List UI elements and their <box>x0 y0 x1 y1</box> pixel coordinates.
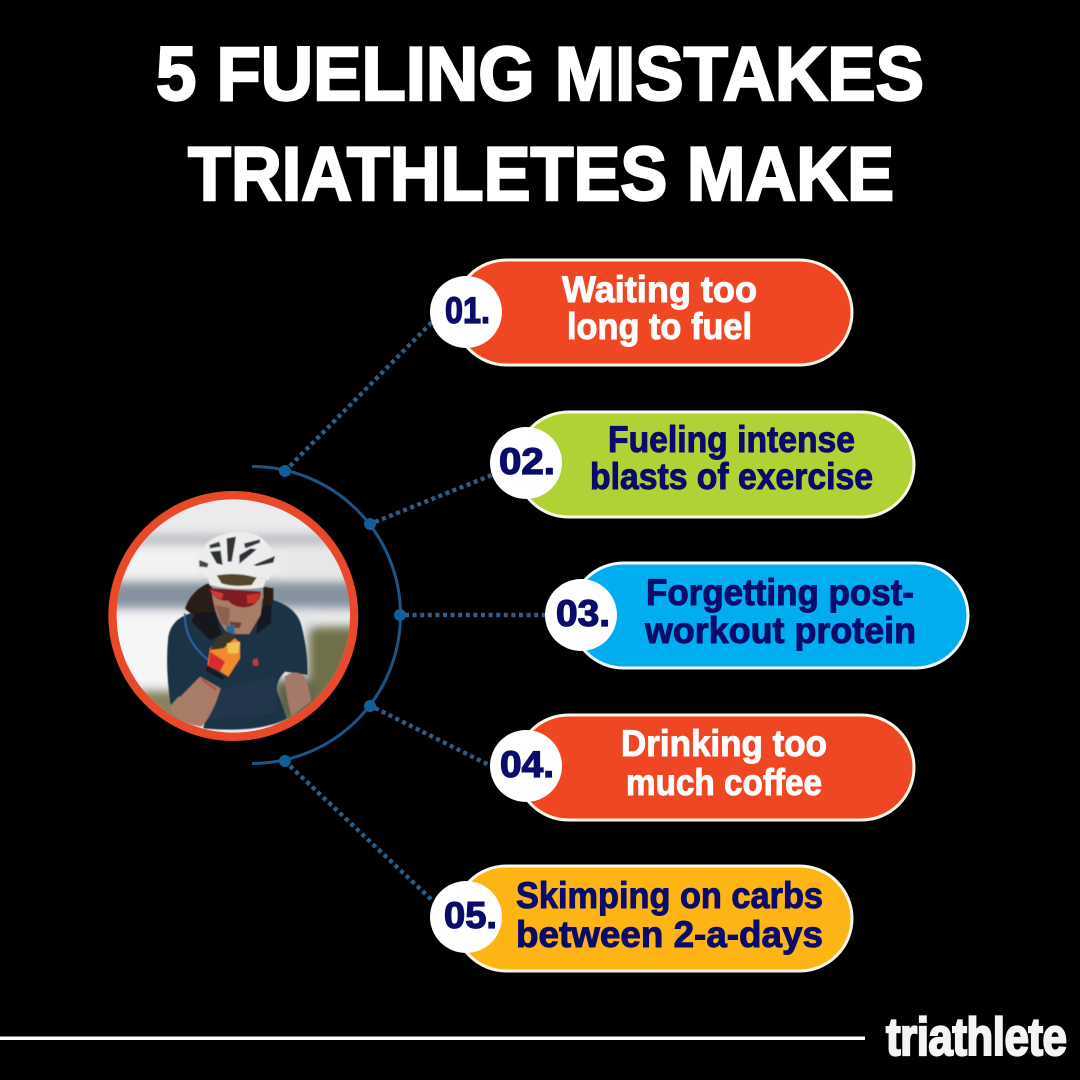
pill 01: waiting too long to fuel <box>430 260 852 365</box>
label 04: much coffee <box>626 762 822 803</box>
face <box>212 592 263 634</box>
photo: cyclist drinking in red ring <box>108 491 358 741</box>
dotted connectors <box>290 320 546 902</box>
pill 03: forgetting post-workout protein <box>545 563 968 668</box>
logo: triathlete: triathlete <box>886 1008 1067 1067</box>
pill 05: skimping on carbs between 2-a-days <box>430 866 852 971</box>
label 05 <box>516 875 823 955</box>
visor <box>207 573 266 589</box>
pill 04: drinking too much coffee <box>490 715 914 820</box>
number badge 04: 04. <box>500 744 554 785</box>
title <box>156 32 924 217</box>
footer rule <box>0 1036 865 1040</box>
label 01: Waiting too <box>562 269 757 310</box>
hair <box>185 583 217 616</box>
title: TRIATHLETES MAKE <box>188 132 894 217</box>
arms <box>285 672 311 717</box>
label 05: Skimping on carbs <box>516 875 823 916</box>
label 02: blasts of exercise <box>590 456 873 497</box>
label 03: workout protein <box>644 610 916 651</box>
label 01: long to fuel <box>567 306 752 347</box>
label 04: Drinking too <box>621 723 827 764</box>
label 03: Forgetting post- <box>646 572 914 613</box>
number badge 03 <box>545 579 617 651</box>
number badge 05 <box>430 881 502 953</box>
glove <box>207 632 240 677</box>
label 02: Fueling intense <box>608 419 855 460</box>
jersey <box>167 598 307 730</box>
number badge 02 <box>490 427 562 499</box>
number badge 01: 01. <box>445 290 490 331</box>
mouth tube <box>226 624 235 637</box>
label 04 <box>621 723 827 803</box>
number badge 01 <box>430 276 502 348</box>
label 01 <box>562 269 757 347</box>
helmet <box>199 532 277 580</box>
hydration tube <box>185 613 208 660</box>
label 02 <box>590 419 873 497</box>
label 05: between 2-a-days <box>516 914 823 955</box>
number badge 02: 02. <box>499 441 555 482</box>
title: 5 FUELING MISTAKES <box>156 32 924 117</box>
number badge 04 <box>490 730 562 802</box>
glasses <box>209 588 261 607</box>
pill 02: fueling intense blasts of exercise <box>490 412 914 517</box>
connector arc with nodes <box>252 465 406 767</box>
label 03 <box>644 572 916 651</box>
number badge 03: 03. <box>556 593 610 634</box>
number badge 05: 05. <box>444 895 497 936</box>
